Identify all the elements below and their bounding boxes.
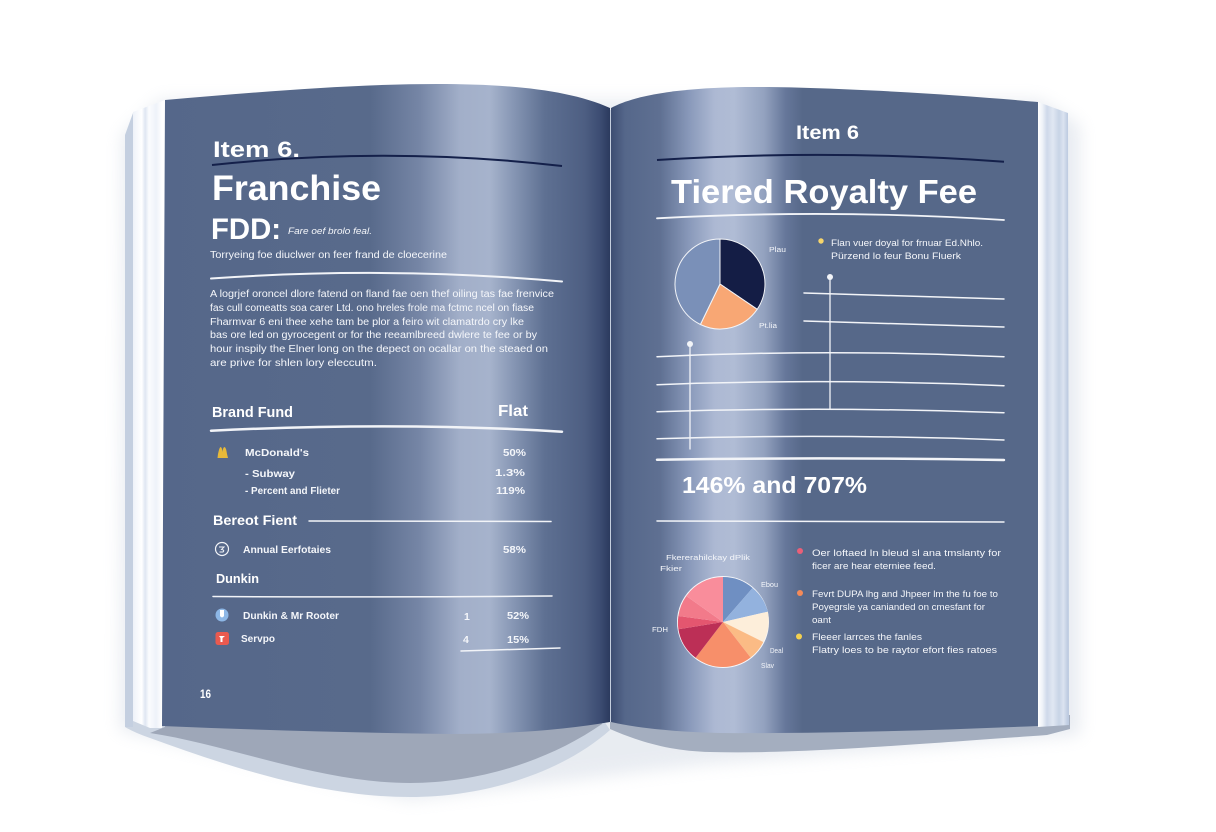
table 1 header: Flat xyxy=(498,403,529,420)
rule xyxy=(657,521,1004,522)
row: Annual: Annual Eerfotaies xyxy=(243,544,331,556)
dark rule xyxy=(212,156,562,166)
breakdown labels: Ebou xyxy=(761,580,778,589)
bullet note xyxy=(818,238,983,261)
subtitle: Torryeing foe diuclwer on feer frand de cloecerine xyxy=(210,250,447,261)
heading: FDD: FDD: xyxy=(211,213,281,246)
table rule xyxy=(211,426,562,432)
pie labels: Plau xyxy=(769,247,786,254)
body paragraph: bas ore led on gyrocegent or for the reeamlbreed dwlere te fee or by xyxy=(210,330,537,341)
heading: Franchise: Franchise xyxy=(212,169,381,208)
cover edge left xyxy=(125,113,133,727)
rule xyxy=(657,458,1004,460)
book underside: right xyxy=(610,715,1070,752)
rows: Dunkin: 52% xyxy=(507,610,530,622)
section heading: Bereot Fient: Bereot Fient xyxy=(213,512,297,528)
pie labels: Pt.lia xyxy=(759,323,777,330)
rows: Dunkin: 1 xyxy=(464,611,470,623)
breakdown labels xyxy=(652,553,783,670)
body paragraph: fas cull comeatts soa carer Ltd. ono hreles frole ma fctmc ncel on fiase xyxy=(210,303,534,314)
table 1 rows: - Subway xyxy=(245,468,295,480)
breakdown labels: Slav xyxy=(761,661,774,670)
table 1 header xyxy=(212,403,529,421)
bullet list: Fleeer larrces the fanles xyxy=(812,632,922,643)
breakdown labels: FDH xyxy=(652,625,668,634)
body paragraph: hour inspily the Elner long on the depect on ocallar on the steaed on xyxy=(210,344,548,355)
table 1 rows: 1.3% xyxy=(495,467,526,479)
table 1 rows: 119% xyxy=(496,485,526,497)
panel: left page xyxy=(162,84,610,734)
icon: circle badge xyxy=(216,542,228,556)
dark rule xyxy=(657,155,1004,162)
body paragraph: A logrjef oroncel dlore fatend on fland fae oen thef oiling tas fae frenvice xyxy=(210,289,554,300)
section rule xyxy=(213,595,552,598)
page number: 16 xyxy=(200,687,211,701)
key figures: 146% and 707% xyxy=(682,472,867,498)
title: Tiered Royalty Fee xyxy=(671,173,977,210)
panel: right page xyxy=(610,87,1038,733)
icon: McDonald's arches xyxy=(218,447,228,458)
pie chart: tiers xyxy=(675,239,765,329)
heading: Item 6: Item 6. xyxy=(213,137,300,162)
spine highlight xyxy=(610,110,612,722)
bullet list: Oer loftaed In bleud sl ana tmslanty for xyxy=(812,548,1001,559)
bullet list: Flatry loes to be raytor efort fies ratoes xyxy=(812,645,997,656)
rows: Dunkin: Dunkin & Mr Rooter xyxy=(243,610,339,622)
bullet list: Poyegrsle ya canianded on cmesfant for xyxy=(812,602,985,613)
white rule xyxy=(211,273,562,282)
section rule xyxy=(309,520,551,522)
soft drop shadow xyxy=(120,100,1080,800)
breakdown labels: Fkererahilckay dPlik xyxy=(666,553,750,562)
page stack right xyxy=(1038,102,1069,727)
small note: Fare oef brolo feal. xyxy=(288,226,372,236)
row: Annual: 58% xyxy=(503,544,527,556)
bullet list: Fevrt DUPA lhg and Jhpeer lm the fu foe to xyxy=(812,589,998,600)
table 1 rows: McDonald's xyxy=(245,447,309,459)
table 1 rows: - Percent and Flieter xyxy=(245,485,340,497)
body paragraph: are prive for shlen lory eleccutm. xyxy=(210,358,377,369)
table 1 rows: 50% xyxy=(503,447,527,459)
heading: Item 6: Item 6 xyxy=(796,123,859,144)
rows: Dunkin: 4 xyxy=(463,634,469,646)
body paragraph xyxy=(210,289,554,369)
icon: red square xyxy=(216,632,229,645)
bullet list xyxy=(796,548,1001,656)
body paragraph: Fharmvar 6 eni thee xehe tam be plor a feiro wit clamatrdo cry lke xyxy=(210,317,524,328)
page stack left xyxy=(133,100,165,728)
breakdown labels: Fkier xyxy=(660,564,683,573)
bullet note: Flan vuer doyal for frnuar Ed.Nhlo. xyxy=(831,238,983,248)
rows: Dunkin: Servpo xyxy=(241,633,275,645)
table 1 rows xyxy=(245,447,527,497)
rows: Dunkin: 15% xyxy=(507,634,530,646)
rows: Dunkin xyxy=(241,610,530,646)
bullet note: Pürzend lo feur Bonu Fluerk xyxy=(831,251,962,261)
pie labels xyxy=(759,247,786,330)
book underside: left xyxy=(125,715,610,797)
row: Annual xyxy=(243,544,527,556)
white rule xyxy=(657,214,1004,220)
tier line chart xyxy=(657,274,1004,449)
table 1 header: Brand Fund xyxy=(212,404,293,421)
bullet list: oant xyxy=(812,615,831,626)
bullet list: ficer are hear eterniee feed. xyxy=(812,561,936,572)
breakdown labels: Deal xyxy=(770,646,783,655)
icon: blue circle xyxy=(216,608,228,622)
total rule xyxy=(461,648,560,651)
pie chart: breakdown xyxy=(677,576,769,668)
section heading: Dunkin: Dunkin xyxy=(216,571,259,586)
